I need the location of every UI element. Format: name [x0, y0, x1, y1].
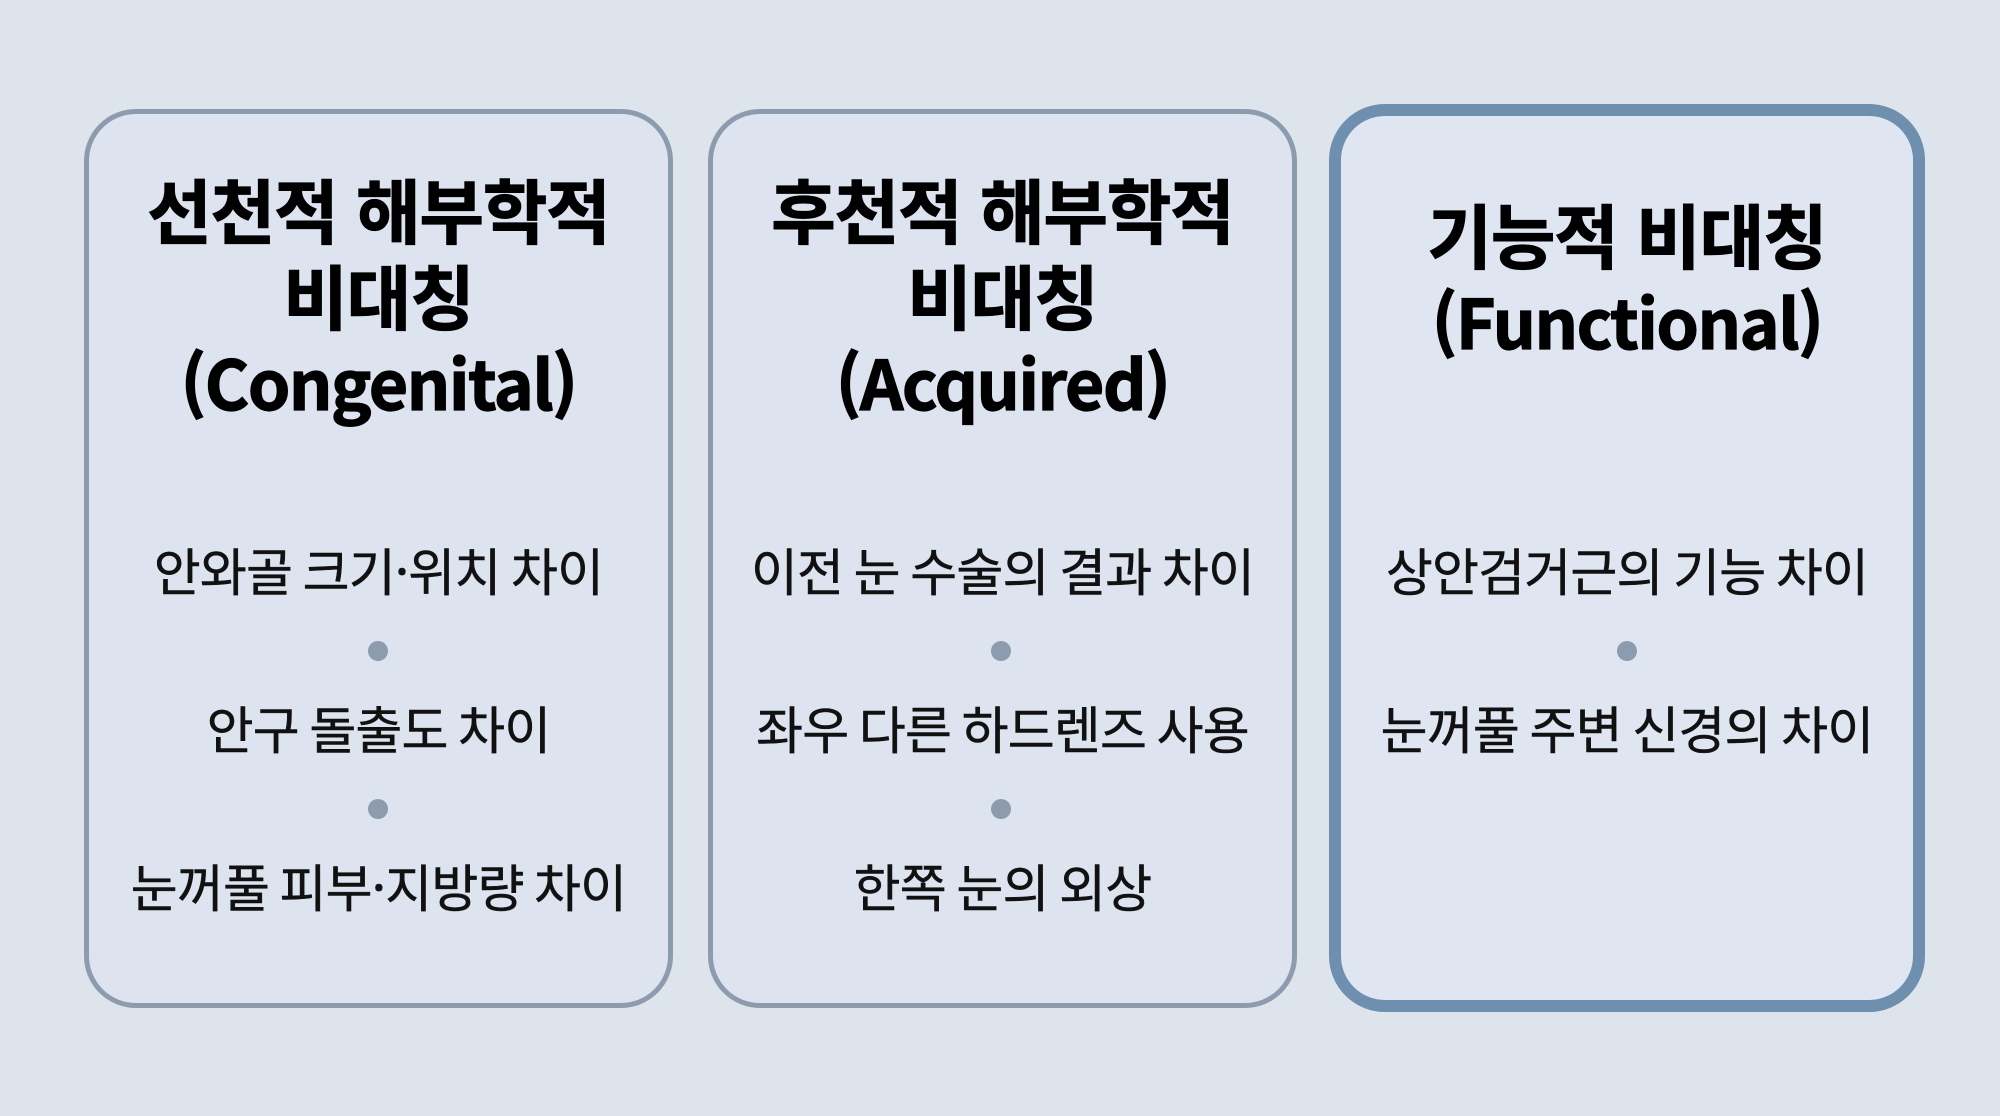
- heading: functional: 기능적 비대칭: [1428, 183, 1826, 284]
- item: levator: 상안검거근의 기능 차이: [1386, 532, 1868, 606]
- heading: acquired: 비대칭: [907, 244, 1098, 345]
- dot: [991, 641, 1011, 661]
- dot: [368, 641, 388, 661]
- panel: functional: [1329, 104, 1925, 1012]
- heading: functional: (Functional): [1432, 270, 1822, 369]
- heading: functional: [1428, 183, 1826, 369]
- heading: congenital: 비대칭: [283, 244, 474, 345]
- heading: congenital: [147, 158, 610, 430]
- dot: [991, 799, 1011, 819]
- dot: [1617, 641, 1637, 661]
- heading: acquired: (Acquired): [836, 331, 1169, 430]
- heading: congenital: 선천적 해부학적: [147, 158, 610, 259]
- item: orbit: 안와골 크기·위치 차이: [154, 532, 603, 606]
- item: nerve: 눈꺼풀 주변 신경의 차이: [1381, 690, 1873, 764]
- heading: acquired: 후천적 해부학적: [771, 158, 1234, 259]
- item: surgery: 이전 눈 수술의 결과 차이: [751, 532, 1254, 606]
- item: lens: 좌우 다른 하드렌즈 사용: [756, 690, 1249, 764]
- panel: acquired: [708, 109, 1297, 1008]
- panel: congenital: [84, 109, 673, 1008]
- item: eyelid: 눈꺼풀 피부·지방량 차이: [131, 848, 626, 922]
- item: trauma: 한쪽 눈의 외상: [854, 848, 1151, 922]
- dot: [368, 799, 388, 819]
- item: eyeball: 안구 돌출도 차이: [207, 690, 550, 764]
- heading: acquired: [771, 158, 1234, 430]
- heading: congenital: (Congenital): [181, 331, 576, 430]
